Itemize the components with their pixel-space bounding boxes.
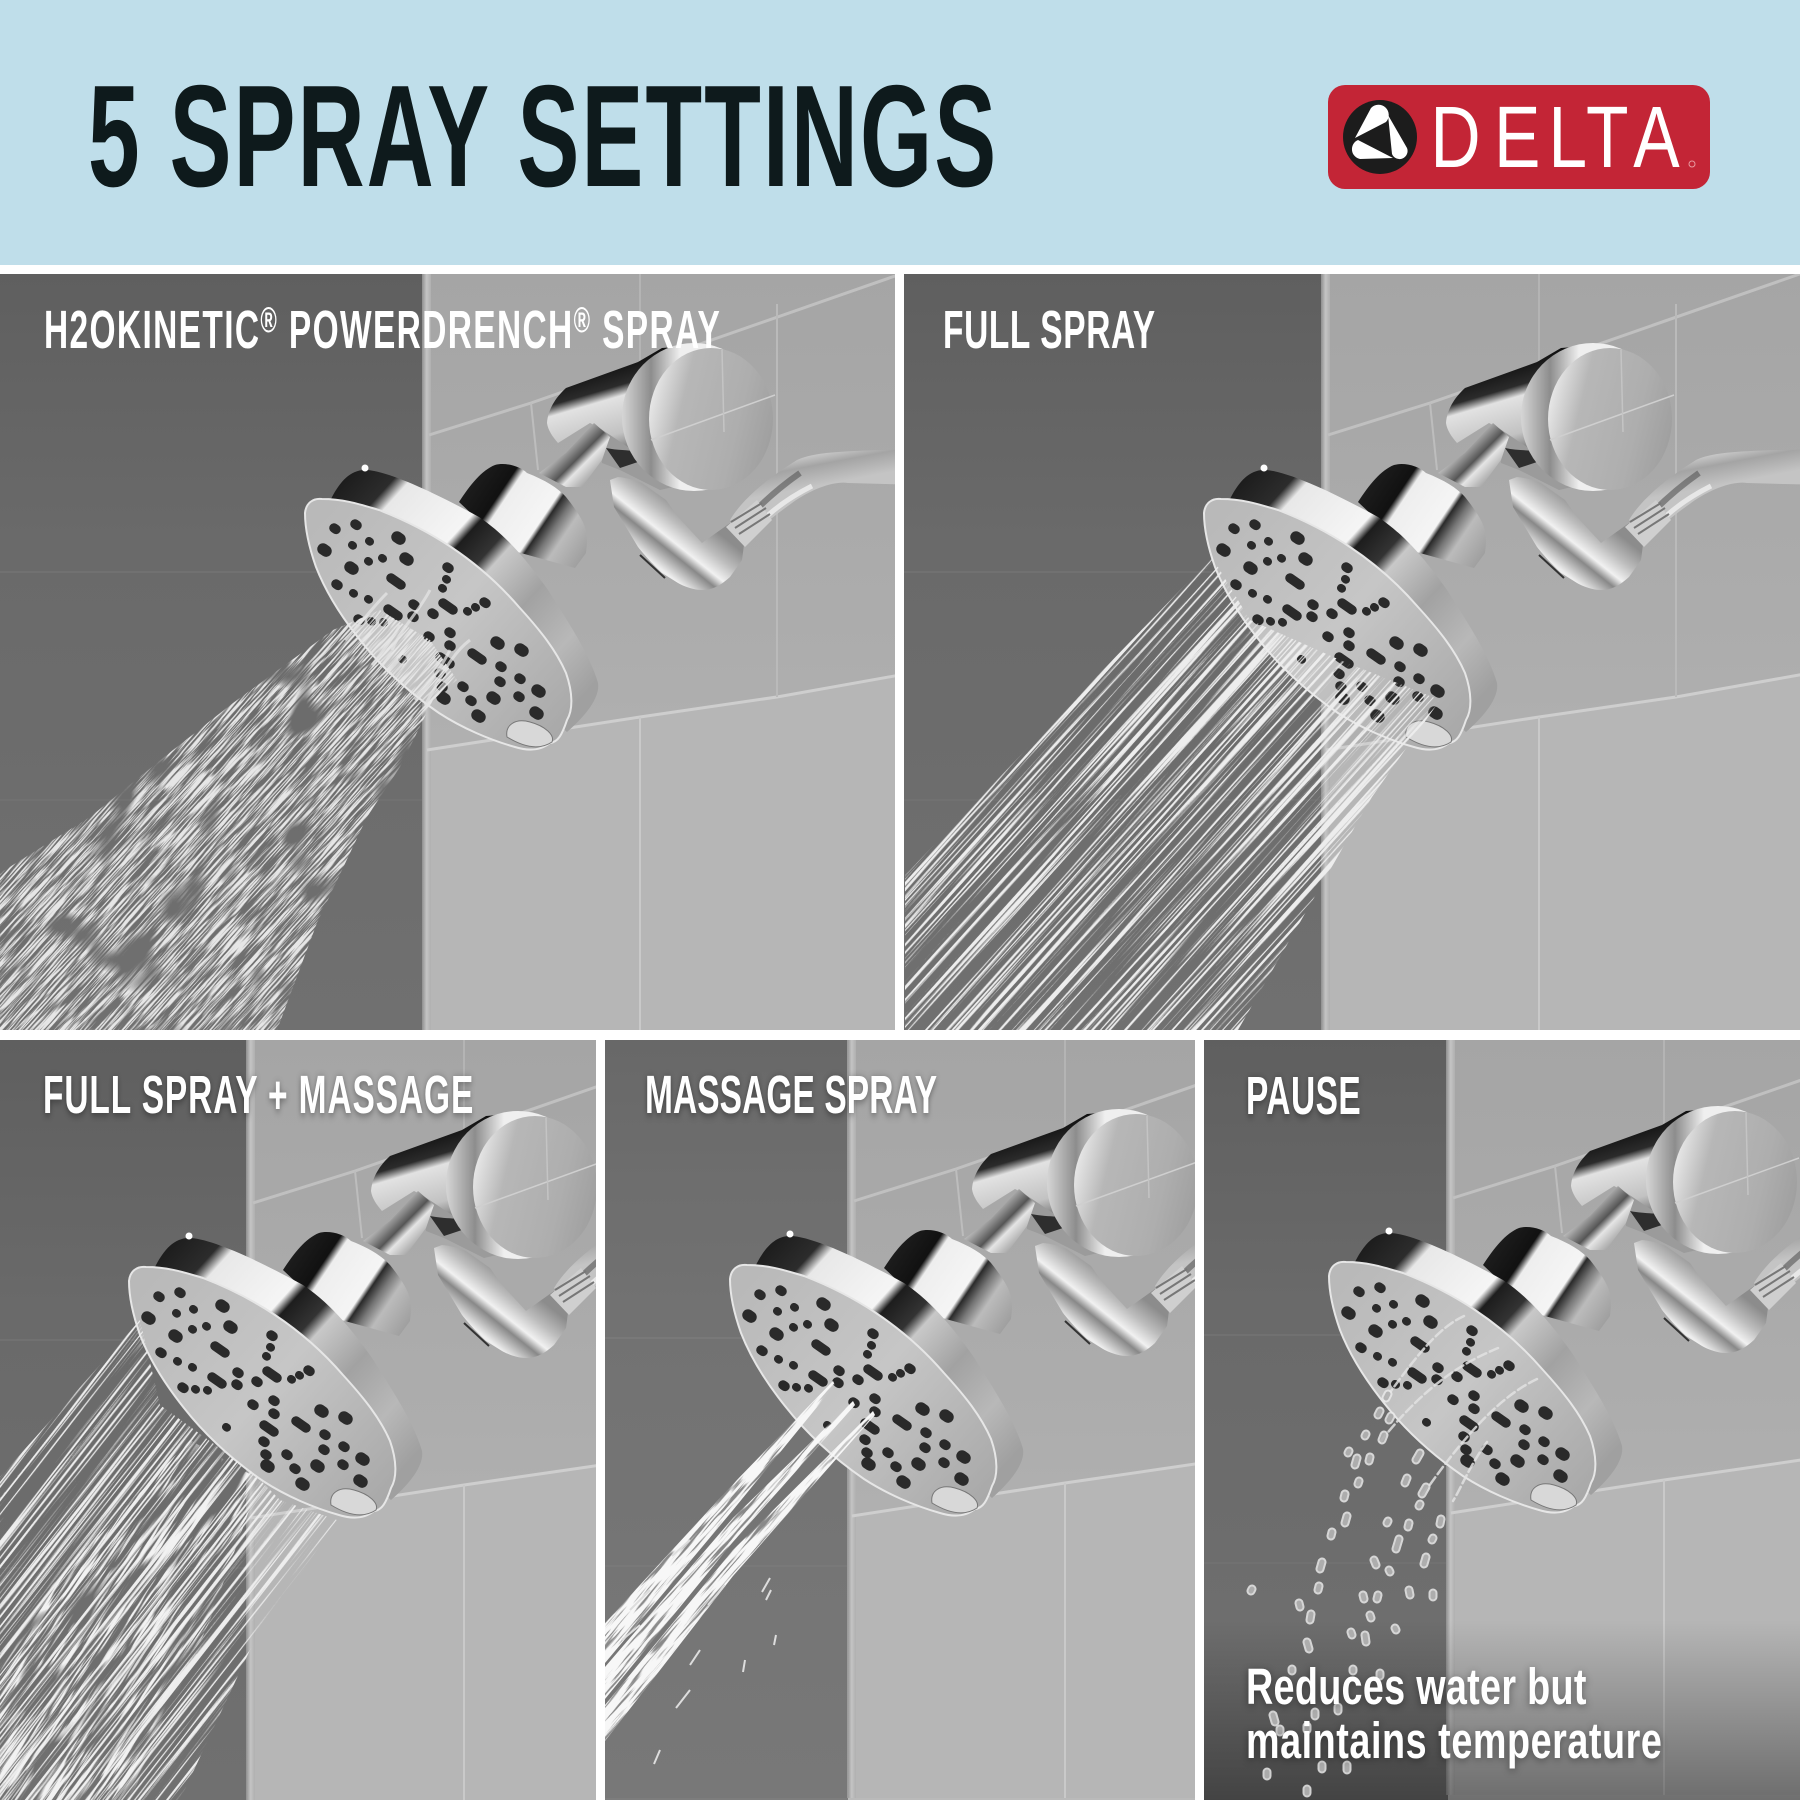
water spray [905,557,1440,1030]
logo: Delta: DELTA [1430,89,1680,186]
logo: Delta [1328,85,1710,189]
water spray [0,590,470,1030]
panel: full spray [904,274,1800,1030]
lighter background glass [605,1040,848,1800]
label: SPRAY [591,299,720,360]
shower wall [125,970,1549,1798]
caption: Reduces water but [1246,1657,1586,1715]
shower wall [599,204,1800,1032]
label: POWERDRENCH [278,299,572,360]
panel: H2Okinetic PowerDrench spray [0,274,895,1030]
label: H2OKINETIC [44,299,259,360]
water spray [605,1381,875,1764]
label: MASSAGE SPRAY [645,1064,937,1125]
shower head [129,1111,824,1518]
shower head [1329,1106,1800,1513]
panel: pause [1204,1040,1800,1800]
bottom fade [1204,1620,1800,1800]
water drips [1251,1316,1537,1793]
panel: massage spray [605,1040,1195,1800]
water spray [0,1320,337,1800]
label: ® [574,301,590,340]
shower head [305,343,1000,750]
shower head [730,1109,1425,1516]
label: FULL SPRAY [943,299,1155,360]
panel: full spray + massage [0,1040,596,1800]
shower wall [724,967,1800,1795]
shower wall [0,204,1124,1032]
label: PAUSE [1246,1065,1361,1126]
caption [1246,1657,1662,1769]
label: ® [260,301,277,340]
header band [0,0,1800,265]
title: 5 SPRAY SETTINGS [88,55,996,217]
caption: maintains temperature [1246,1711,1662,1769]
label: FULL SPRAY + MASSAGE [43,1064,473,1125]
shower head [1204,343,1800,750]
shower wall [0,972,948,1800]
